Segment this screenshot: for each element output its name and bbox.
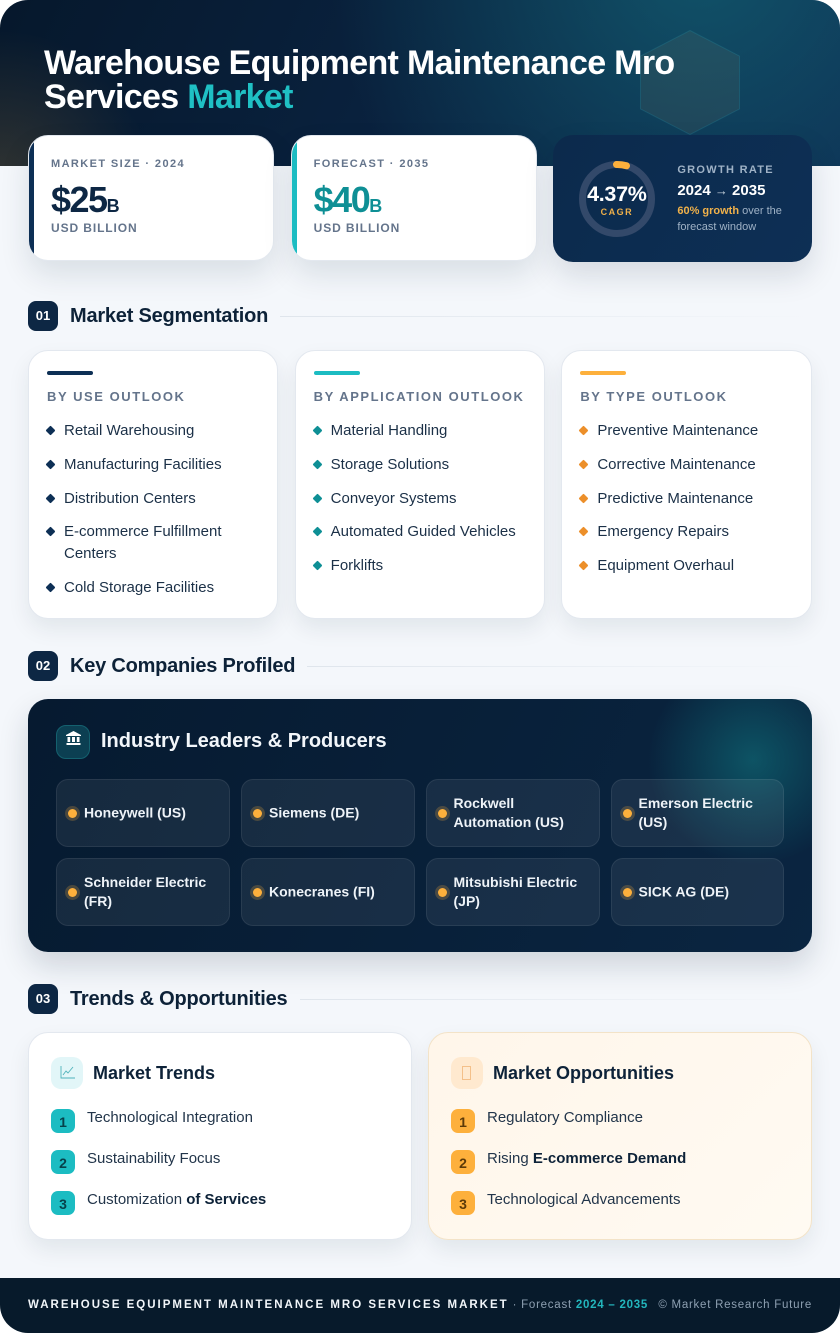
panel: by use outlook: Retail Warehousing bbox=[64, 422, 194, 439]
panel: by type outlook: Equipment Overhaul bbox=[597, 557, 734, 574]
panel: by application outlook: Material Handling bbox=[331, 422, 447, 439]
section heading: market segmentation: Market Segmentation bbox=[70, 305, 268, 327]
panel: by application outlook: Storage Solutions bbox=[331, 456, 449, 473]
panel: market trends: 1 bbox=[59, 1114, 67, 1130]
company: Siemens: Siemens (DE) bbox=[269, 804, 359, 820]
section heading: market segmentation bbox=[28, 301, 608, 331]
company: Emerson: Emerson Electric (US) bbox=[638, 795, 753, 830]
company: Rockwell: Rockwell Automation (US) bbox=[454, 795, 564, 830]
panel: market opportunities: 3 bbox=[459, 1196, 467, 1212]
company: Konecranes bbox=[241, 858, 415, 926]
CAGR label: CAGR bbox=[601, 207, 633, 217]
title: Warehouse Equipment Maintenance Mro Services Market bbox=[44, 44, 674, 116]
company: Rockwell bbox=[426, 779, 600, 847]
panel: by application outlook: Automated Guided Vehicles bbox=[331, 523, 516, 540]
company: Honeywell bbox=[56, 779, 230, 847]
decorative hexagon bbox=[640, 30, 740, 135]
company: Mitsubishi: Mitsubishi Electric (JP) bbox=[454, 874, 577, 909]
panel: market opportunities: Technological Advancements bbox=[487, 1191, 680, 1208]
years: 2024 → 2035 bbox=[677, 182, 765, 199]
company: Mitsubishi bbox=[426, 858, 600, 926]
panel: market opportunities: 1 bbox=[459, 1114, 467, 1130]
company: Emerson bbox=[610, 779, 784, 847]
company: Konecranes: Konecranes (FI) bbox=[269, 884, 375, 900]
panel: by type outlook: Emergency Repairs bbox=[597, 523, 729, 540]
panel: by use outlook: Manufacturing Facilities bbox=[64, 456, 222, 473]
company: SICK: SICK AG (DE) bbox=[638, 884, 729, 900]
panel: by application outlook bbox=[295, 350, 545, 619]
growth rate label: GROWTH RATE bbox=[677, 164, 774, 176]
stat card: forecast: FORECAST · 2035 bbox=[314, 158, 429, 170]
stat card: growth rate bbox=[553, 135, 812, 262]
footer bbox=[0, 1278, 840, 1333]
stat card: market size: MARKET SIZE · 2024 bbox=[51, 158, 185, 170]
panel: by application outlook: BY APPLICATION OUTLOOK bbox=[314, 389, 524, 404]
company: Honeywell: Honeywell (US) bbox=[84, 804, 186, 820]
panel: market trends: 2 bbox=[59, 1155, 67, 1171]
panel: by application outlook: Conveyor Systems bbox=[331, 490, 457, 507]
panel: by use outlook: BY USE OUTLOOK bbox=[47, 389, 185, 404]
section heading: key companies: 02 bbox=[36, 658, 50, 673]
panel: market trends bbox=[28, 1032, 412, 1240]
icon: chart bbox=[51, 1057, 83, 1089]
panel: by type outlook: Corrective Maintenance bbox=[597, 456, 756, 473]
panel: by use outlook: Cold Storage Facilities bbox=[64, 579, 214, 596]
footer title: WAREHOUSE EQUIPMENT MAINTENANCE MRO SERVICES MARKET · Forecast 2024 – 2035 bbox=[28, 1299, 648, 1311]
panel: market trends: 3 bbox=[59, 1196, 67, 1212]
icon: institution bbox=[56, 725, 90, 759]
panel: by use outlook: Distribution Centers bbox=[64, 490, 196, 507]
stat card: forecast: $40B bbox=[314, 179, 382, 220]
stat card: market size bbox=[28, 135, 274, 261]
panel: by type outlook: BY TYPE OUTLOOK bbox=[580, 389, 728, 404]
panel: by type outlook: Predictive Maintenance bbox=[597, 490, 753, 507]
stat card: forecast bbox=[291, 135, 537, 261]
section heading: market segmentation: 01 bbox=[36, 308, 50, 323]
stat card: market size: $25B bbox=[51, 179, 120, 220]
panel: by use outlook: E-commerce Fulfillment Centers bbox=[64, 523, 222, 562]
growth description: 60% growth over the forecast window bbox=[677, 205, 782, 233]
panel: market opportunities: 2 bbox=[459, 1155, 467, 1171]
company: Schneider: Schneider Electric (FR) bbox=[84, 874, 206, 909]
panel heading: Industry Leaders & Producers bbox=[101, 730, 387, 752]
section heading: trends bbox=[28, 984, 614, 1014]
panel: market trends: Sustainability Focus bbox=[87, 1150, 220, 1167]
section heading: trends: Trends & Opportunities bbox=[70, 988, 287, 1010]
section heading: key companies bbox=[28, 651, 616, 681]
panel: industry leaders bbox=[28, 699, 812, 952]
panel: market opportunities: Market Opportunities bbox=[493, 1063, 674, 1083]
panel: market trends: Market Trends bbox=[93, 1063, 215, 1083]
panel: by type outlook bbox=[561, 350, 812, 619]
panel: market trends: Technological Integration bbox=[87, 1109, 253, 1126]
company: Siemens bbox=[241, 779, 415, 847]
company: Schneider bbox=[56, 858, 230, 926]
stat card: market size: USD BILLION bbox=[51, 221, 138, 235]
section heading: key companies: Key Companies Profiled bbox=[70, 655, 295, 677]
icon: placeholder glyph bbox=[451, 1057, 483, 1089]
panel: by application outlook: Forklifts bbox=[331, 557, 383, 574]
panel: by type outlook: Preventive Maintenance bbox=[597, 422, 758, 439]
stat card: forecast: USD BILLION bbox=[314, 221, 400, 235]
panel: market opportunities: Rising E-commerce Demand bbox=[487, 1150, 686, 1167]
company: SICK bbox=[610, 858, 784, 926]
header banner bbox=[0, 0, 840, 166]
footer credit: © Market Research Future bbox=[658, 1299, 812, 1311]
CAGR ring bbox=[579, 161, 655, 237]
panel: market trends: Customization of Services bbox=[87, 1191, 266, 1208]
panel: by use outlook bbox=[28, 350, 278, 619]
panel: market opportunities bbox=[428, 1032, 812, 1240]
section heading: trends: 03 bbox=[36, 991, 50, 1006]
panel: market opportunities: Regulatory Compliance bbox=[487, 1109, 643, 1126]
CAGR value: 4.37% bbox=[587, 182, 647, 206]
